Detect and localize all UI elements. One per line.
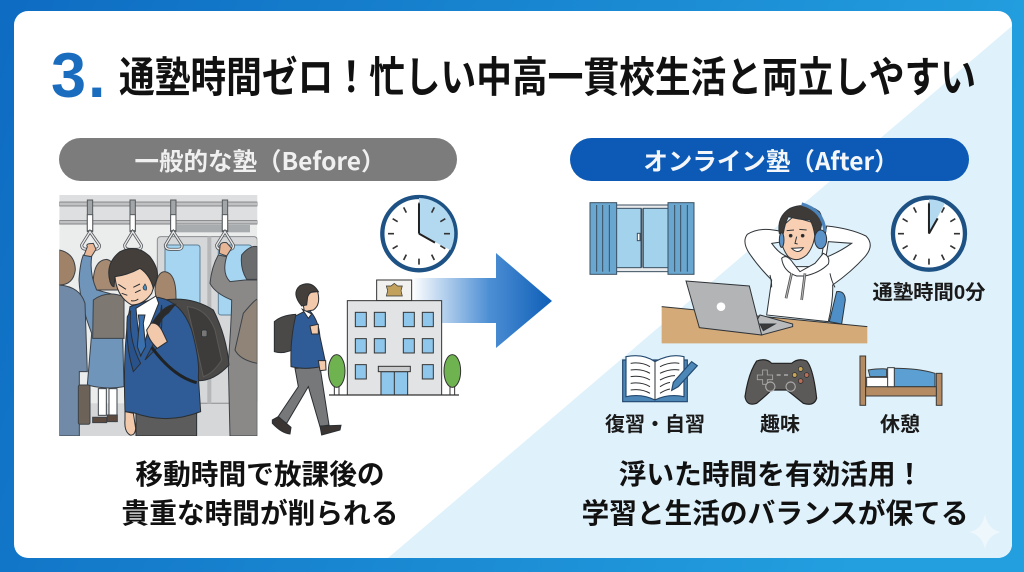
illustration: walking student [272,284,341,435]
panel heading: Before [59,138,457,181]
hanging straps [82,200,233,249]
label: zero commute: 通塾時間0分 [872,281,986,304]
title: 通塾時間ゼロ！忙しい中高一貫校生活と両立しやすい [119,55,976,102]
arrow [412,253,552,348]
caption: after: 学習と生活のバランスが保てる [581,498,969,529]
caption: after: 浮いた時間を有効活用！ [619,459,923,490]
icon: bed [860,356,942,405]
caption: before: 貴重な時間が削られる [122,498,398,529]
passenger: woman with backpack [79,243,124,423]
caption: after [581,459,969,529]
illustration: school building [328,280,461,395]
illustration: clock (long commute) [382,197,456,270]
icon: open notebook and pen [623,356,697,402]
illustration: clock (zero commute) [893,198,965,270]
title: 3. [51,41,108,111]
passenger: left man in suit [59,250,90,436]
illustration: relaxed student at laptop [662,204,870,343]
illustration: crowded train commuter [59,195,257,436]
decorative sparkle [969,514,1001,549]
label: hobby: 趣味 [760,413,800,436]
panel heading: After [570,138,969,181]
title [51,41,976,111]
illustration: window with curtains [590,203,694,274]
main student: commuter [109,248,229,436]
caption: before: 移動時間で放課後の [135,459,385,490]
label: review: 復習・自習 [605,413,705,436]
caption: before [122,459,398,529]
passenger: right man reaching up [210,242,257,436]
icon: game controller [745,360,817,404]
panel heading: After: オンライン塾（After） [643,143,899,178]
passenger in the back [155,272,176,303]
label: rest: 休憩 [880,413,920,436]
panel heading: Before: 一般的な塾（Before） [134,143,386,178]
